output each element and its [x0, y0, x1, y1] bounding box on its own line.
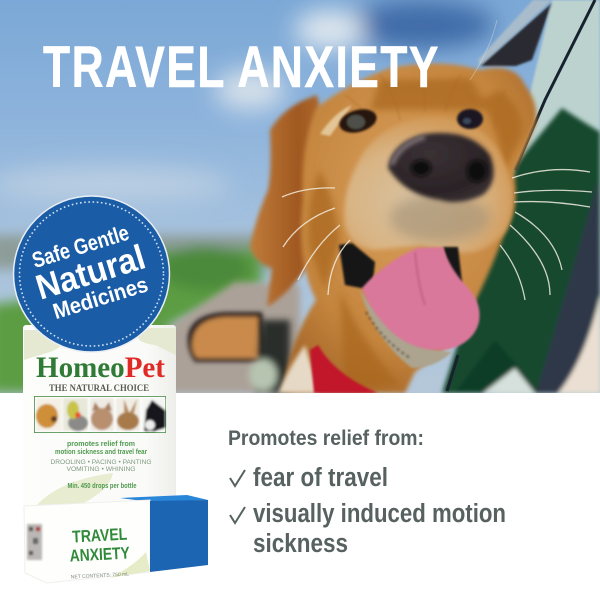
badge: safe gentle natural medicines	[14, 196, 170, 352]
drops text: Min. 450 drops per bottle	[68, 483, 137, 490]
green reflection	[442, 108, 600, 393]
box label	[69, 525, 131, 566]
car mirror	[188, 312, 270, 362]
badge: safe gentle natural medicines: Safe Gentle	[29, 220, 132, 273]
whiskers	[282, 20, 592, 300]
symptoms text: VOMITING • WHINING	[66, 466, 136, 473]
pale window glass	[522, 0, 600, 192]
head fur darker shading	[309, 78, 522, 390]
clouds	[0, 1, 495, 203]
white patch	[483, 368, 535, 393]
benefit: fear of travel: fear of travel	[253, 464, 388, 492]
blurred car body behind mirror	[249, 320, 290, 393]
forehead fur streaks	[399, 116, 400, 118]
dog muzzle	[344, 118, 512, 253]
car door and window green reflection	[478, 0, 600, 192]
sky background	[0, 0, 600, 393]
blue box side	[150, 500, 208, 572]
symptoms text: DROOLING • PACING • PANTING	[50, 459, 152, 466]
dog nose	[388, 133, 494, 202]
dog tongue	[362, 247, 480, 350]
dog ear left	[250, 95, 330, 307]
product claim text: motion sickness and travel fear	[55, 449, 147, 456]
box back panel	[23, 325, 176, 515]
blue box top	[120, 495, 208, 502]
road	[152, 282, 300, 393]
product claim text: promotes relief from	[67, 441, 135, 448]
red collar	[310, 345, 378, 393]
silver frame	[478, 0, 552, 66]
dog head	[282, 63, 536, 393]
dog photo	[36, 398, 62, 431]
cream stripe above left eye	[320, 105, 352, 136]
benefit: visually induced motion sickness: visually induced motion	[253, 500, 506, 528]
photo: dog looking out of car window	[0, 0, 600, 393]
grey under nose	[390, 194, 490, 242]
chest white fur	[278, 345, 320, 393]
background hills	[0, 235, 280, 393]
rabbit photo	[116, 398, 140, 431]
benefits heading: Promotes relief from:	[228, 427, 424, 450]
box leaf	[110, 552, 150, 578]
benefit: visually induced motion sickness	[230, 500, 506, 558]
net contents: NET CONTENTS: 750 mL	[71, 571, 129, 581]
badge: safe gentle natural medicines: Medicines	[50, 272, 151, 324]
bottom white panel	[0, 393, 600, 600]
tagline: THE NATURAL CHOICE	[49, 384, 149, 394]
product box	[23, 325, 208, 583]
title: TRAVEL ANXIETY	[43, 35, 440, 100]
symptoms text	[50, 459, 152, 473]
white box front	[24, 500, 150, 583]
dark frame wedge	[480, 3, 552, 66]
cat photo	[90, 398, 114, 431]
box label: TRAVEL	[72, 525, 128, 546]
window post line	[447, 0, 595, 391]
benefits text	[228, 427, 506, 558]
lower lip fur	[360, 290, 452, 368]
dog eye right	[457, 109, 483, 129]
dog eye left	[338, 108, 378, 134]
black and white dog photo	[142, 398, 165, 431]
QR code	[27, 524, 42, 560]
dog mouth dark interior	[339, 243, 462, 290]
benefit: visually induced motion sickness: sickness	[253, 530, 348, 558]
leaf decoration on top of panel	[24, 328, 176, 360]
badge: safe gentle natural medicines: Natural	[31, 238, 150, 308]
brand name: HomeoPet	[36, 351, 165, 384]
animal photo strip	[34, 396, 166, 432]
box label: ANXIETY	[69, 543, 131, 566]
product claim text	[55, 441, 147, 456]
bird photo	[63, 398, 88, 431]
leaf decoration lower	[37, 473, 113, 505]
dark door stripe	[536, 180, 600, 393]
peach door	[558, 295, 600, 393]
